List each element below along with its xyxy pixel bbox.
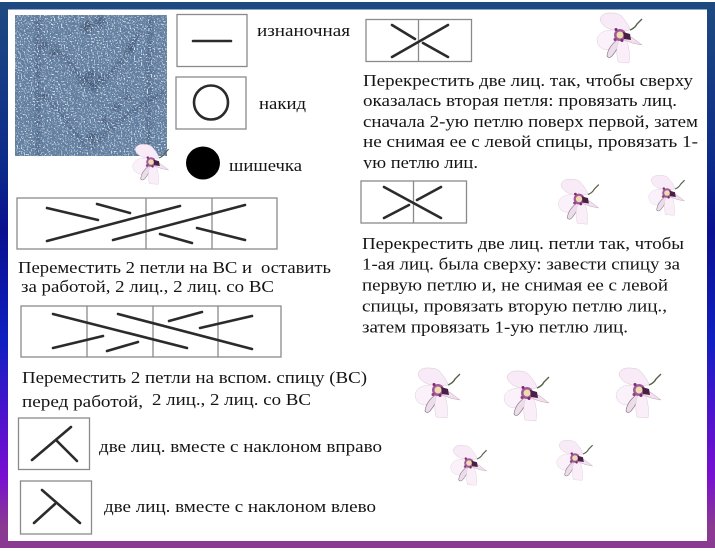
text: left-leaning cable instructions (22, 368, 367, 411)
flower bottom row one right (616, 368, 661, 418)
label: bobble: шишечка (229, 156, 302, 175)
flower bottom row two right (557, 440, 593, 480)
chart: right-leaning four-stitch cable (17, 198, 277, 249)
text: second crossing instructions: Перекрестить две лиц. петли так, чтобы (362, 234, 684, 253)
chart: second two-stitch crossing (361, 181, 466, 223)
symbol: purl (177, 14, 247, 66)
symbol: knit two together right (18, 418, 90, 470)
flower bottom row one centre (504, 371, 549, 421)
text: second crossing instructions (362, 234, 684, 336)
text: second crossing instructions: затем провязать 1-ую петлю лиц. (362, 318, 628, 336)
label: knit two together right: две лиц. вместе с наклоном вправо (99, 437, 382, 456)
chart: first two-stitch crossing (366, 20, 472, 62)
label: knit two together left: две лиц. вместе с наклоном влево (104, 497, 376, 516)
text: first crossing instructions: не снимая ее с левой спицы, провязать 1- (363, 132, 698, 151)
photo: knitted swatch (15, 15, 167, 156)
text: left-leaning cable instructions: перед работой, (22, 392, 143, 411)
text: first crossing instructions: оказалась вторая петля: провязать лиц. (363, 91, 677, 110)
flower bottom row one left (415, 368, 460, 418)
symbol: bobble (186, 146, 220, 180)
flower middle left (558, 179, 599, 224)
symbol: yarn over (176, 77, 246, 129)
flower top right (597, 13, 642, 63)
text: second crossing instructions: спицы, провязать вторую петлю лиц., (362, 296, 667, 316)
text: right-leaning cable instructions: Переместить 2 петли на ВС и (18, 258, 252, 277)
text: right-leaning cable instructions: оставить (261, 258, 331, 277)
text: right-leaning cable instructions (18, 258, 331, 296)
chart: left-leaning four-stitch cable (21, 306, 281, 357)
flower middle right (649, 175, 685, 215)
flower near swatch (133, 144, 169, 184)
text: first crossing instructions: ую петлю лиц. (363, 153, 478, 172)
symbol: knit two together left (20, 481, 92, 534)
label: yarn over: накид (259, 94, 306, 113)
text: right-leaning cable instructions: за работой, 2 лиц., 2 лиц. со ВС (21, 277, 274, 296)
text: second crossing instructions: первую петлю и, не снимая ее с левой (362, 276, 668, 294)
text: left-leaning cable instructions: 2 лиц., 2 лиц. со ВС (152, 390, 311, 409)
text: second crossing instructions: 1-ая лиц. была сверху: завести спицу за (362, 254, 680, 274)
label: purl: изнаночная (257, 21, 350, 40)
flower bottom row two left (451, 445, 487, 485)
text: first crossing instructions: сначала 2-ую петлю поверх первой, затем (363, 112, 698, 131)
text: left-leaning cable instructions: Переместить 2 петли на вспом. спицу (ВС) (22, 368, 367, 387)
text: first crossing instructions: Перекрестить две лиц. так, чтобы сверху (363, 71, 693, 90)
text: first crossing instructions (360, 71, 698, 176)
